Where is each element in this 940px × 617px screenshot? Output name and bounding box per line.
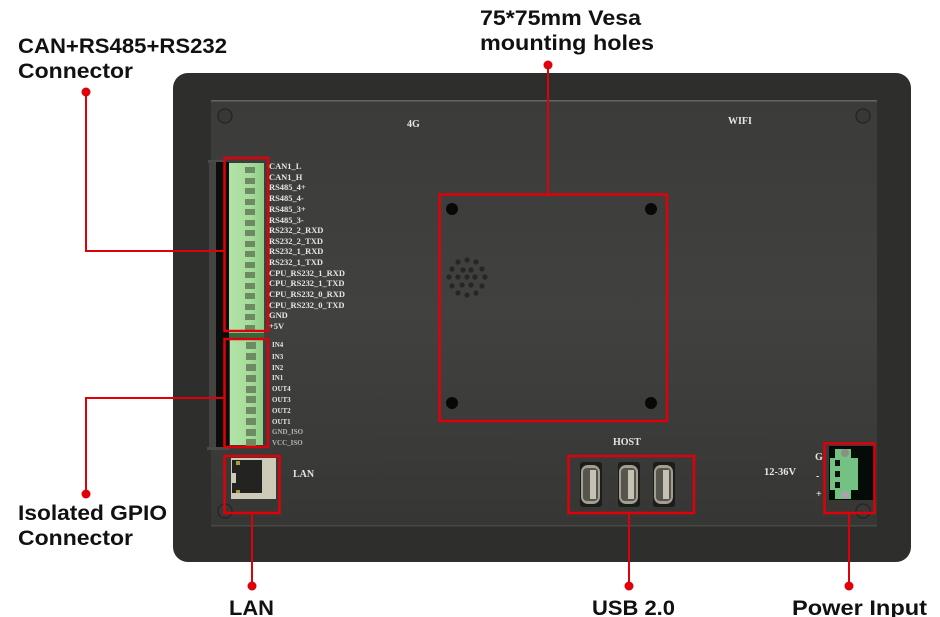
heading: VESA: mounting holes — [480, 32, 654, 55]
voltage and polarity labels: + — [816, 489, 822, 500]
GPIO pin labels: IN4 — [272, 341, 284, 349]
callout box: CAN connector — [224, 158, 268, 331]
GPIO pin labels: OUT1 — [272, 418, 291, 426]
CAN RS485 RS232 terminal block — [208, 160, 264, 450]
GPIO pin labels: OUT2 — [272, 407, 291, 415]
heading: CAN: CAN+RS485+RS232 — [18, 35, 227, 58]
CAN pin labels: CPU_RS232_1_TXD — [269, 278, 344, 288]
CAN pin labels: RS232_1_TXD — [269, 257, 323, 267]
CAN pin labels: CPU_RS232_0_TXD — [269, 300, 344, 310]
LAN port — [231, 458, 276, 499]
CAN pin labels: RS485_4- — [269, 193, 304, 203]
CAN pin labels: RS232_2_TXD — [269, 236, 323, 246]
callout box: USB — [568, 456, 694, 513]
GPIO pin labels: IN2 — [272, 364, 284, 372]
callout box: LAN — [224, 456, 280, 513]
device bezel — [173, 73, 911, 562]
GPIO pin labels: IN1 — [272, 374, 284, 382]
CAN pin labels: RS485_3- — [269, 215, 304, 225]
GPIO pin labels — [272, 341, 304, 447]
CAN pin labels: CPU_RS232_0_RXD — [269, 289, 345, 299]
heading: CAN: Connector — [18, 60, 133, 83]
GPIO pin labels: OUT4 — [272, 385, 291, 393]
GPIO terminal block — [207, 340, 263, 450]
heading: VESA — [480, 7, 654, 55]
heading: GPIO — [18, 502, 167, 550]
callout box: VESA holes — [440, 194, 667, 421]
antenna labels: WIFI — [728, 116, 752, 127]
CAN pin labels: CAN1_H — [269, 172, 303, 182]
power connector — [829, 446, 876, 500]
panel screws — [218, 109, 870, 518]
LAN label: LAN — [293, 469, 315, 480]
voltage and polarity labels: - — [816, 471, 819, 482]
HOST label: HOST — [613, 437, 641, 448]
CAN pin labels: RS485_3+ — [269, 204, 306, 214]
leader: LAN — [248, 513, 256, 590]
voltage and polarity labels: G — [815, 452, 823, 463]
antenna labels: 4G — [407, 119, 420, 130]
GPIO pin labels: IN3 — [272, 353, 284, 361]
antenna labels — [407, 116, 752, 130]
CAN pin labels: CAN1_L — [269, 161, 302, 171]
GPIO pin labels: VCC_ISO — [272, 439, 303, 447]
leader: USB — [624, 513, 634, 590]
heading: CAN — [18, 35, 227, 83]
callout box: power input — [824, 444, 874, 513]
CAN pin labels: CPU_RS232_1_RXD — [269, 268, 345, 278]
heading: GPIO: Connector — [18, 527, 133, 550]
USB ports — [580, 462, 675, 507]
voltage and polarity labels — [764, 452, 823, 500]
GPIO pin labels: OUT3 — [272, 396, 291, 404]
CAN pin labels: RS485_4+ — [269, 182, 306, 192]
inner back panel — [211, 100, 877, 526]
CAN pin labels: +5V — [269, 321, 284, 331]
heading: GPIO: Isolated GPIO — [18, 502, 167, 525]
heading: VESA: 75*75mm Vesa — [480, 7, 641, 30]
voltage and polarity labels: 12-36V — [764, 467, 796, 478]
GPIO pin labels: GND_ISO — [272, 428, 304, 436]
speaker holes — [446, 257, 488, 298]
leader: CAN — [82, 88, 224, 251]
leader: power — [844, 513, 854, 590]
CAN pin labels: GND — [269, 310, 288, 320]
leader: GPIO — [82, 398, 224, 498]
VESA mounting holes — [446, 203, 657, 409]
CAN pin labels: RS232_2_RXD — [269, 225, 323, 235]
leader: VESA — [544, 60, 552, 194]
callout box: GPIO connector — [224, 339, 268, 447]
CAN pin labels — [269, 161, 345, 331]
CAN pin labels: RS232_1_RXD — [269, 246, 323, 256]
